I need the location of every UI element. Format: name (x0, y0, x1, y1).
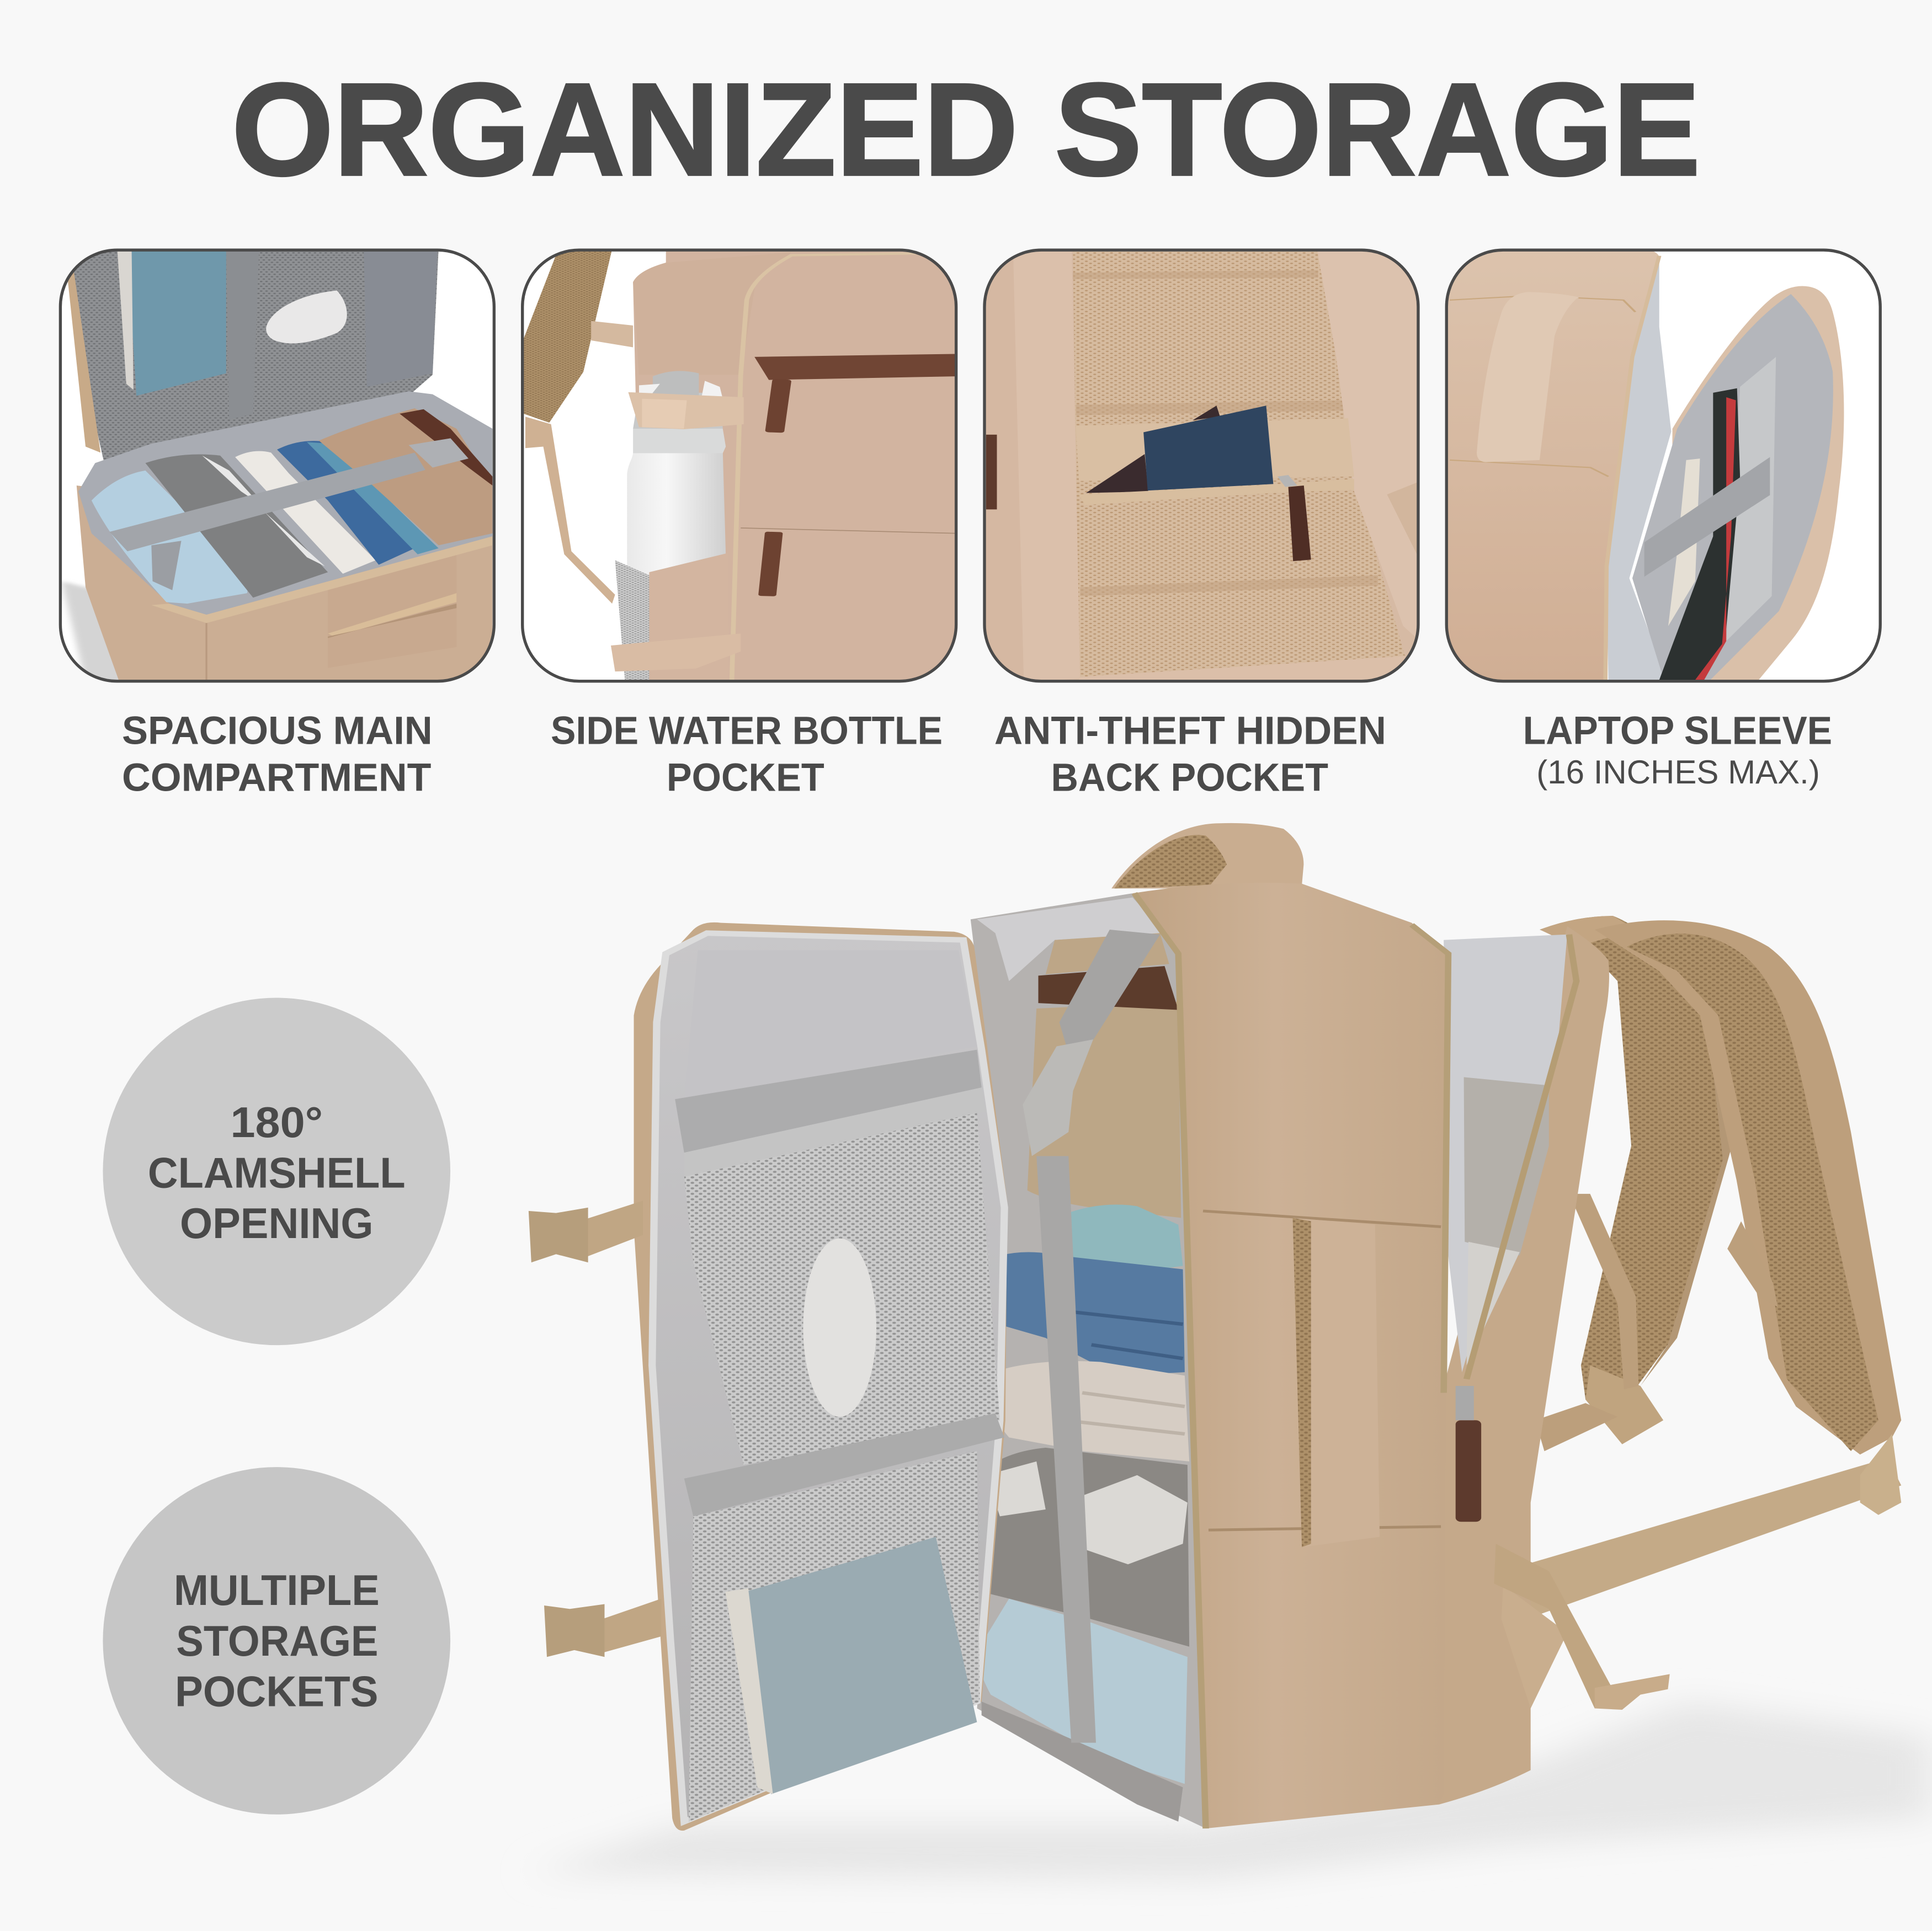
hero: open backpack (529, 823, 1931, 1880)
white sweater (235, 451, 376, 574)
panel: side water bottle pocket (523, 249, 956, 684)
top handle (1477, 292, 1578, 462)
back compartment lining (1444, 935, 1567, 1372)
side handle (328, 593, 456, 637)
inner silver lining (1606, 256, 1671, 684)
seams (1203, 1211, 1441, 1530)
mesh back padding (1073, 249, 1405, 679)
bottom buckle strap (611, 633, 741, 671)
front tan panel (1132, 883, 1448, 1828)
lower zipper pull (758, 532, 783, 596)
badge: multiple storage pockets: POCKETS (175, 1667, 378, 1715)
cream knit (994, 1361, 1189, 1461)
top buckle strap (628, 392, 744, 429)
buckle (1023, 1039, 1093, 1156)
plaid shirt (1064, 1204, 1183, 1278)
floor shadow (62, 581, 119, 680)
far shoulder strap (1540, 916, 1732, 1444)
panel borders (60, 250, 1880, 681)
laptop (1726, 357, 1776, 641)
caption: laptop sleeve: LAPTOP SLEEVE (1523, 709, 1832, 753)
light blue folded shirt (92, 471, 250, 604)
floor lining (982, 1701, 1183, 1822)
tan body (1447, 249, 1659, 684)
caption: side water bottle pocket: SIDE WATER BOTTLE (551, 709, 943, 753)
caption: anti-theft hidden back pocket: ANTI-THEFT HIDDEN (994, 709, 1386, 753)
caption: spacious main compartment (122, 709, 433, 799)
near shoulder strap (1595, 920, 1901, 1454)
badge: 180 degree clamshell opening (103, 997, 450, 1345)
packing cube (319, 408, 492, 545)
caption: spacious main compartment: SPACIOUS MAIN (122, 709, 433, 753)
side release buckles (529, 1201, 661, 1657)
dark folio (1659, 388, 1740, 680)
denim (277, 441, 414, 565)
backpack body (627, 249, 956, 684)
caption: laptop sleeve: (16 INCHES MAX.) (1536, 753, 1820, 791)
seams (1450, 296, 1635, 477)
mouse (803, 1239, 876, 1417)
notebook (1668, 458, 1700, 626)
lower side strap and triangle (1494, 1544, 1670, 1710)
plaid (307, 442, 439, 554)
caption: side water bottle pocket: POCKET (667, 755, 824, 799)
upper mesh pocket (684, 1113, 1000, 1465)
body back side (1439, 926, 1609, 1805)
caption: spacious main compartment: COMPARTMENT (122, 755, 431, 799)
water bottle (627, 451, 726, 577)
panel: spacious main compartment (60, 249, 494, 684)
lining opening (78, 391, 492, 615)
navy notebook (1143, 406, 1273, 490)
buckle (409, 438, 469, 467)
caption: anti-theft hidden back pocket (994, 709, 1386, 799)
main compartment interior (971, 893, 1206, 1828)
left zipper pull (986, 435, 997, 509)
laptop (1464, 1077, 1549, 1256)
lower webbing strap (1526, 1434, 1901, 1619)
upper zipper band (675, 1050, 982, 1153)
badge: 180 degree clamshell opening: OPENING (180, 1199, 374, 1247)
packing cube (1028, 1002, 1181, 1218)
caption: laptop sleeve (1523, 709, 1832, 791)
side handle (1293, 1218, 1380, 1547)
lid lining (652, 933, 1004, 1822)
brown zip garage (754, 354, 956, 380)
badge: 180 degree clamshell opening: CLAMSHELL (148, 1148, 406, 1197)
adjuster webbing upper (1535, 1194, 1777, 1451)
lower strap webbing (1387, 483, 1417, 554)
open lid lining (66, 249, 439, 460)
shoulder strap (524, 249, 612, 423)
lid grey lining (1632, 294, 1833, 684)
jeans (985, 1252, 1185, 1375)
badge: multiple storage pockets: MULTIPLE (174, 1566, 380, 1614)
grey strap (1644, 457, 1770, 577)
title: ORGANIZED STORAGE (232, 56, 1700, 203)
grey knit sweater (145, 455, 328, 598)
caption: side water bottle pocket (551, 709, 943, 799)
carry handle (1111, 823, 1303, 888)
mesh pocket (615, 560, 649, 684)
zipper pull (1289, 486, 1311, 561)
zipper piping (732, 253, 956, 683)
webbing band (1076, 418, 1354, 481)
dark passport (1086, 406, 1220, 493)
right strap (1317, 249, 1420, 641)
clamshell lid (634, 922, 1007, 1831)
open lid outer (1671, 286, 1844, 684)
zipper pull (1456, 1386, 1481, 1522)
compression strap (1036, 1156, 1096, 1743)
white mouse (266, 291, 347, 344)
panel: laptop sleeve (1446, 249, 1880, 684)
edge piping (1135, 893, 1206, 1828)
badge: 180 degree clamshell opening: 180° (231, 1098, 323, 1146)
left strap (1013, 249, 1080, 683)
panel: anti-theft hidden back pocket (984, 249, 1420, 683)
caption: anti-theft hidden back pocket: BACK POCKET (1051, 755, 1328, 799)
notebook (746, 1537, 977, 1794)
grey strap (109, 452, 425, 551)
light blue folded shirt (978, 1599, 1188, 1784)
blue notebook (127, 249, 226, 396)
grey patterned knit (972, 1448, 1189, 1647)
tan box body (77, 486, 492, 684)
pocket edge (1079, 479, 1354, 505)
badge: multiple storage pockets: STORAGE (176, 1617, 378, 1665)
lower mesh pocket (689, 1451, 980, 1822)
badge: multiple storage pockets (103, 1467, 450, 1815)
back zipper piping (1467, 935, 1577, 1379)
lower zipper band (684, 1413, 1004, 1516)
floor shadow (533, 1701, 1931, 1880)
